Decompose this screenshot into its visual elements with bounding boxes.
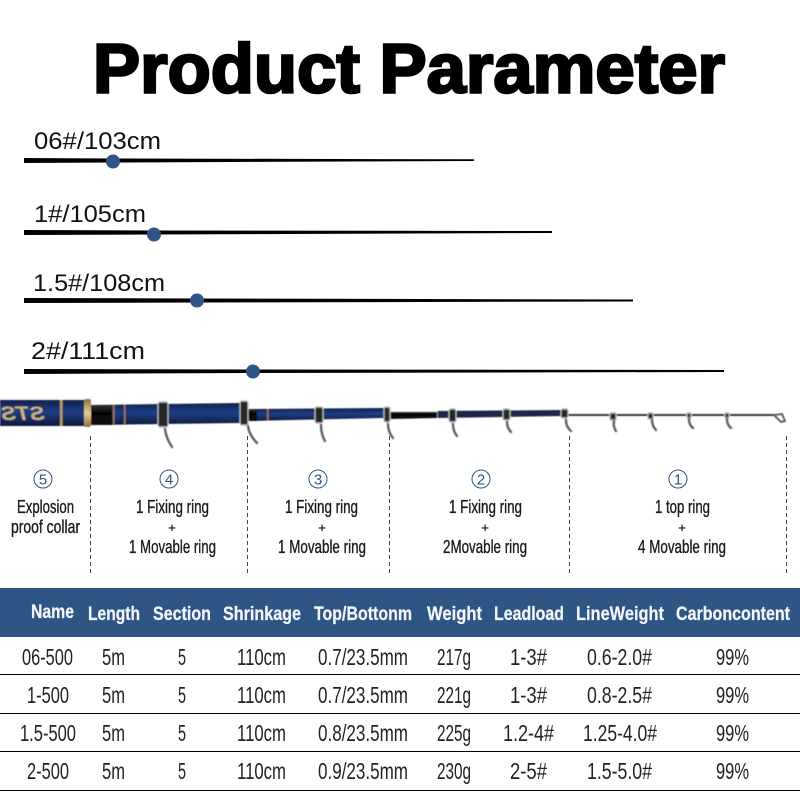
table row 1-500: 99%	[716, 682, 749, 708]
section label 3: 1 Movable ring	[278, 537, 366, 557]
table row 1.5-500: 225g	[437, 720, 471, 746]
table row 1.5-500: 5	[178, 720, 186, 746]
section label 4: 4	[165, 472, 173, 488]
section label 2	[443, 470, 527, 557]
length 06#/103cm: 06#/103cm	[34, 128, 161, 155]
table row 06-500: 5m	[102, 644, 125, 670]
table row 1.5-500: 1.25-4.0#	[583, 720, 657, 746]
table row 06-500: 0.6-2.0#	[587, 644, 652, 670]
section label 1: 4 Movable ring	[638, 537, 726, 557]
table row 2-500: 110cm	[237, 758, 286, 784]
rod section 5: collar	[0, 399, 91, 427]
section label 4	[129, 470, 216, 557]
length 1#/105cm	[24, 201, 552, 242]
table row 06-500: 0.7/23.5mm	[318, 644, 408, 670]
length indicators	[24, 128, 724, 378]
table row 1-500: 5	[178, 682, 186, 708]
title: Product Parameter	[93, 30, 725, 108]
table row 1-500	[0, 682, 800, 714]
section dividers	[90, 436, 786, 574]
table row 1-500: 0.8-2.5#	[587, 682, 652, 708]
section label 2: 2	[477, 472, 485, 488]
length 1#/105cm: 1#/105cm	[34, 201, 146, 228]
table row 1.5-500: 1.2-4#	[503, 720, 554, 746]
rod section 5: collar: STS	[1, 404, 45, 425]
rod section 4	[91, 403, 240, 425]
table row 2-500	[0, 758, 800, 791]
section label 5: 5	[39, 472, 47, 488]
rod section 1: tip	[566, 414, 785, 422]
length 1.5#/108cm	[24, 270, 633, 308]
section label 4: 1 Movable ring	[129, 537, 216, 557]
section label 4: +	[168, 520, 176, 535]
table row 1-500: 0.7/23.5mm	[318, 682, 408, 708]
section label 2: +	[481, 520, 489, 535]
section label 5	[11, 470, 80, 537]
table row 06-500: 99%	[716, 644, 749, 670]
table row 06-500: 217g	[437, 644, 471, 670]
table header	[0, 588, 800, 637]
table row 06-500: 110cm	[237, 644, 286, 670]
table header: Top/Bottonm	[314, 603, 412, 625]
table row 1.5-500: 99%	[716, 720, 749, 746]
section label 2: 1 Fixing ring	[449, 497, 522, 517]
section label 3: +	[318, 520, 326, 535]
table row 1-500: 110cm	[237, 682, 286, 708]
rod section 3	[248, 408, 386, 421]
table header: Length	[88, 603, 140, 625]
table row 2-500: 2-5#	[510, 758, 547, 784]
rod section 2	[390, 410, 563, 419]
table row 1-500: 221g	[437, 682, 471, 708]
length 2#/111cm	[24, 338, 724, 378]
ring guides	[158, 401, 731, 447]
section label 1: 1 top ring	[655, 497, 710, 517]
section label 1: 1	[674, 472, 682, 488]
fishing rod	[0, 399, 785, 447]
table row 1.5-500	[0, 720, 800, 752]
table row 1-500: 1-3#	[510, 682, 547, 708]
table row 06-500: 1-3#	[510, 644, 547, 670]
section label 3: 3	[314, 472, 322, 488]
table row 1.5-500: 110cm	[237, 720, 286, 746]
length 1.5#/108cm: 1.5#/108cm	[33, 270, 165, 297]
table row 1.5-500: 5m	[102, 720, 125, 746]
table row 2-500: 1.5-5.0#	[587, 758, 652, 784]
parameter table	[0, 588, 800, 791]
table header: Section	[153, 603, 211, 625]
table row 1.5-500: 0.8/23.5mm	[318, 720, 408, 746]
table header: Leadload	[494, 603, 564, 625]
section label 3	[278, 470, 366, 557]
table row 2-500: 5m	[102, 758, 125, 784]
table row 2-500: 2-500	[27, 758, 69, 784]
table row 1.5-500: 1.5-500	[20, 720, 76, 746]
table row 06-500: 5	[178, 644, 186, 670]
section label 4: 1 Fixing ring	[136, 497, 209, 517]
section label 1	[638, 470, 726, 557]
section label 5: proof collar	[11, 517, 80, 537]
table header: Weight	[427, 603, 482, 625]
section label 1: +	[678, 520, 686, 535]
table row 06-500	[0, 644, 800, 675]
length 2#/111cm: 2#/111cm	[31, 338, 145, 365]
table row 2-500: 230g	[437, 758, 471, 784]
table header: Shrinkage	[223, 603, 301, 625]
table row 2-500: 0.9/23.5mm	[318, 758, 408, 784]
table row 2-500: 99%	[716, 758, 749, 784]
section label 3: 1 Fixing ring	[285, 497, 358, 517]
table row 1-500: 5m	[102, 682, 125, 708]
length 06#/103cm	[24, 128, 474, 168]
table row 2-500: 5	[178, 758, 186, 784]
table header: Name	[31, 601, 74, 623]
section label 5: Explosion	[17, 497, 74, 517]
table row 06-500: 06-500	[22, 644, 73, 670]
section label 2: 2Movable ring	[443, 537, 527, 557]
table row 1-500: 1-500	[27, 682, 69, 708]
table header: LineWeight	[576, 603, 664, 625]
